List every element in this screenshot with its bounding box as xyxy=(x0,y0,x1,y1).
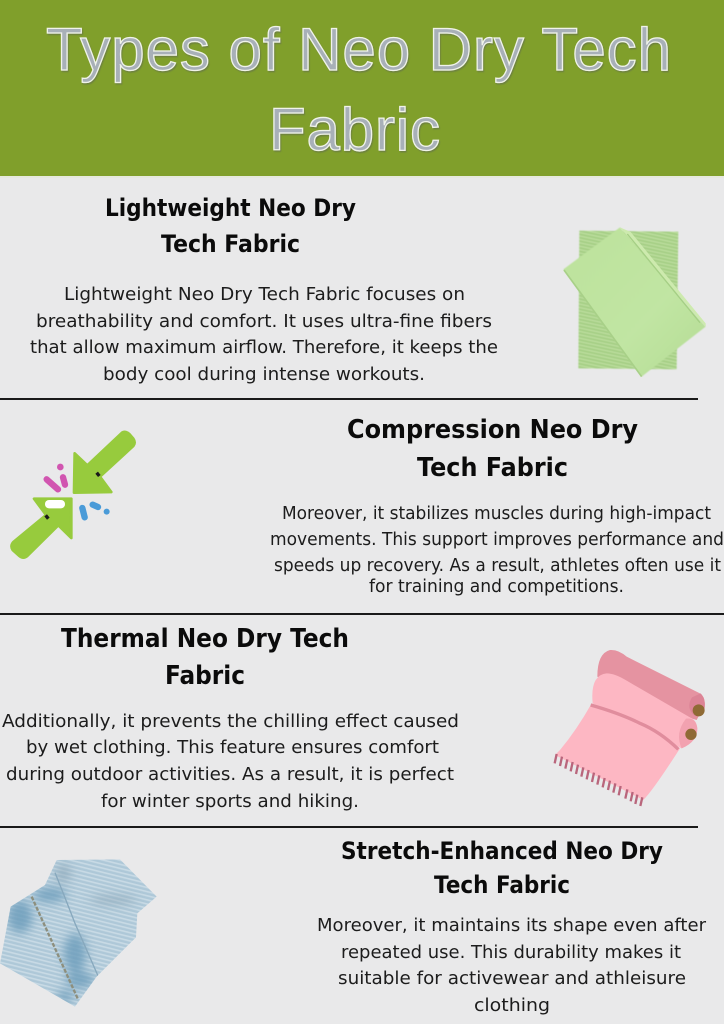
heading: thermal: Thermal Neo Dry Tech xyxy=(61,624,349,654)
divider xyxy=(0,613,724,615)
text: thermal description xyxy=(2,712,459,812)
text: stretch-enhanced description: repeated use. This durability makes it xyxy=(341,943,681,963)
title: Types of Neo Dry Tech xyxy=(46,16,671,83)
text: stretch-enhanced description: Moreover, it maintains its shape even after xyxy=(317,916,707,936)
heading: compression: Tech Fabric xyxy=(417,453,568,483)
heading: stretch-enhanced: Tech Fabric xyxy=(434,871,570,899)
text: compression description: movements. This support improves performance and xyxy=(270,530,724,550)
heading: compression xyxy=(347,415,638,483)
text: lightweight description xyxy=(30,285,498,385)
text: lightweight description: Lightweight Neo Dry Tech Fabric focuses on xyxy=(64,285,465,305)
text: thermal description: Additionally, it prevents the chilling effect caused xyxy=(2,712,459,732)
text: stretch-enhanced description xyxy=(317,916,707,1016)
text: compression description xyxy=(270,504,724,597)
icon: rolled pink scarf xyxy=(555,650,705,806)
text: thermal description: for winter sports and hiking. xyxy=(101,792,359,812)
heading: stretch-enhanced: Stretch-Enhanced Neo Dry xyxy=(341,837,663,865)
text: compression description: Moreover, it stabilizes muscles during high-impact xyxy=(282,504,711,524)
section: compression fabric xyxy=(11,415,724,597)
text: thermal description: during outdoor activities. As a result, it is perfect xyxy=(6,765,454,785)
heading: lightweight xyxy=(105,194,356,258)
text: thermal description: by wet clothing. This feature ensures comfort xyxy=(26,738,439,758)
icon: folded green fabric xyxy=(563,227,706,377)
text: compression description: for training and competitions. xyxy=(369,577,624,597)
section: thermal fabric xyxy=(2,624,705,812)
heading: thermal: Fabric xyxy=(165,661,245,691)
text: compression description: speeds up recovery. As a result, athletes often use it xyxy=(274,556,721,576)
text: stretch-enhanced description: suitable for activewear and athleisure xyxy=(338,969,686,989)
text: lightweight description: body cool during intense workouts. xyxy=(103,365,425,385)
title: Fabric xyxy=(269,96,440,163)
text: lightweight description: breathability and comfort. It uses ultra-fine fibers xyxy=(36,312,492,332)
title xyxy=(46,16,671,163)
icon: denim fabric swatch xyxy=(0,860,156,1006)
heading: lightweight: Lightweight Neo Dry xyxy=(105,194,356,222)
divider xyxy=(0,826,698,828)
text: stretch-enhanced description: clothing xyxy=(474,996,550,1016)
heading: stretch-enhanced xyxy=(341,837,663,899)
section: stretch-enhanced fabric xyxy=(0,837,707,1016)
heading: thermal xyxy=(61,624,349,691)
section: lightweight fabric xyxy=(30,194,706,385)
divider xyxy=(0,398,698,400)
header banner xyxy=(0,0,724,178)
icon: compression arrows xyxy=(11,432,135,558)
heading: compression: Compression Neo Dry xyxy=(347,415,638,445)
text: lightweight description: that allow maximum airflow. Therefore, it keeps the xyxy=(30,338,498,358)
heading: lightweight: Tech Fabric xyxy=(161,230,300,258)
